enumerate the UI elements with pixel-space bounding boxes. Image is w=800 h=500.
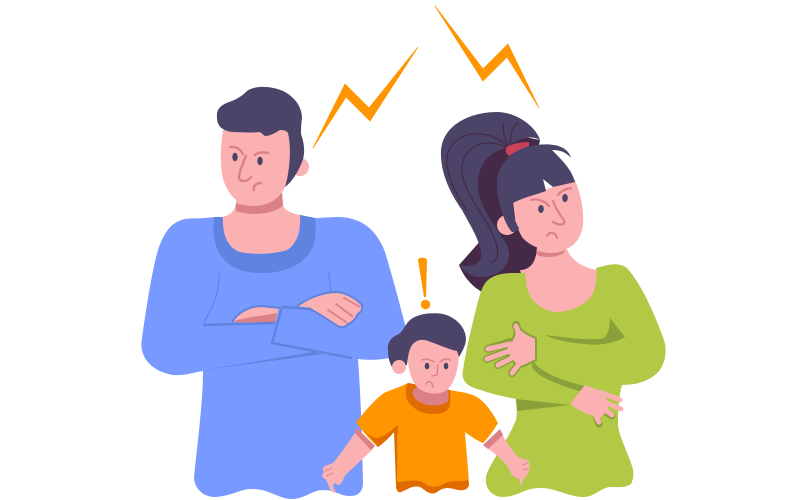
child eyes xyxy=(425,363,448,369)
woman lower hand xyxy=(570,385,621,424)
child hair xyxy=(388,313,466,368)
woman hair tie xyxy=(506,142,529,156)
woman xyxy=(441,112,666,497)
man body xyxy=(141,215,408,499)
child neck xyxy=(413,385,448,405)
man brows, nose and mouth xyxy=(230,147,268,190)
exclamation bar xyxy=(418,258,427,297)
woman hair strands xyxy=(447,123,518,263)
man neck and chest xyxy=(223,190,300,254)
child shirt shadows xyxy=(361,425,469,493)
child brows, nose and mouth xyxy=(422,359,450,387)
woman brows, nose and mouth xyxy=(531,188,571,238)
child left cuff xyxy=(355,427,375,450)
woman upper hand xyxy=(487,323,536,373)
man finger lines xyxy=(328,298,360,322)
woman eyes xyxy=(538,194,568,213)
man face xyxy=(221,130,290,206)
child left arm xyxy=(322,430,373,493)
man sleeve cuff xyxy=(203,307,352,358)
child right arm xyxy=(483,430,530,485)
man crossed arm creases xyxy=(204,272,331,322)
lightning bolt right xyxy=(435,6,539,108)
woman ponytail shadow xyxy=(459,135,540,292)
woman hair front xyxy=(497,144,575,232)
woman ponytail xyxy=(441,112,540,277)
woman face xyxy=(513,180,583,251)
child shirt xyxy=(356,383,498,493)
man eyes xyxy=(232,153,263,165)
woman ear xyxy=(497,215,517,235)
child finger lines xyxy=(325,463,528,476)
man lower hand xyxy=(232,306,280,323)
woman arm shadow xyxy=(545,318,625,345)
child right cuff xyxy=(483,429,503,449)
woman sleeve fold xyxy=(532,360,585,392)
woman waist shadow xyxy=(516,399,570,411)
lightning bolt left xyxy=(313,47,418,148)
child collar xyxy=(406,383,450,414)
child ear xyxy=(392,360,406,374)
man hair xyxy=(217,87,304,187)
woman neck and chest xyxy=(520,245,600,318)
man sleeve shadow xyxy=(205,352,322,370)
child face xyxy=(408,335,459,394)
exclamation dot xyxy=(421,300,430,309)
man ear xyxy=(291,158,309,176)
woman neck shadow xyxy=(536,250,565,257)
child xyxy=(322,258,530,493)
man xyxy=(141,87,408,499)
man upper hand xyxy=(296,292,362,327)
man neck shadow xyxy=(236,193,283,214)
exclamation mark xyxy=(418,258,430,309)
woman body xyxy=(462,264,666,497)
man collar xyxy=(213,215,316,273)
